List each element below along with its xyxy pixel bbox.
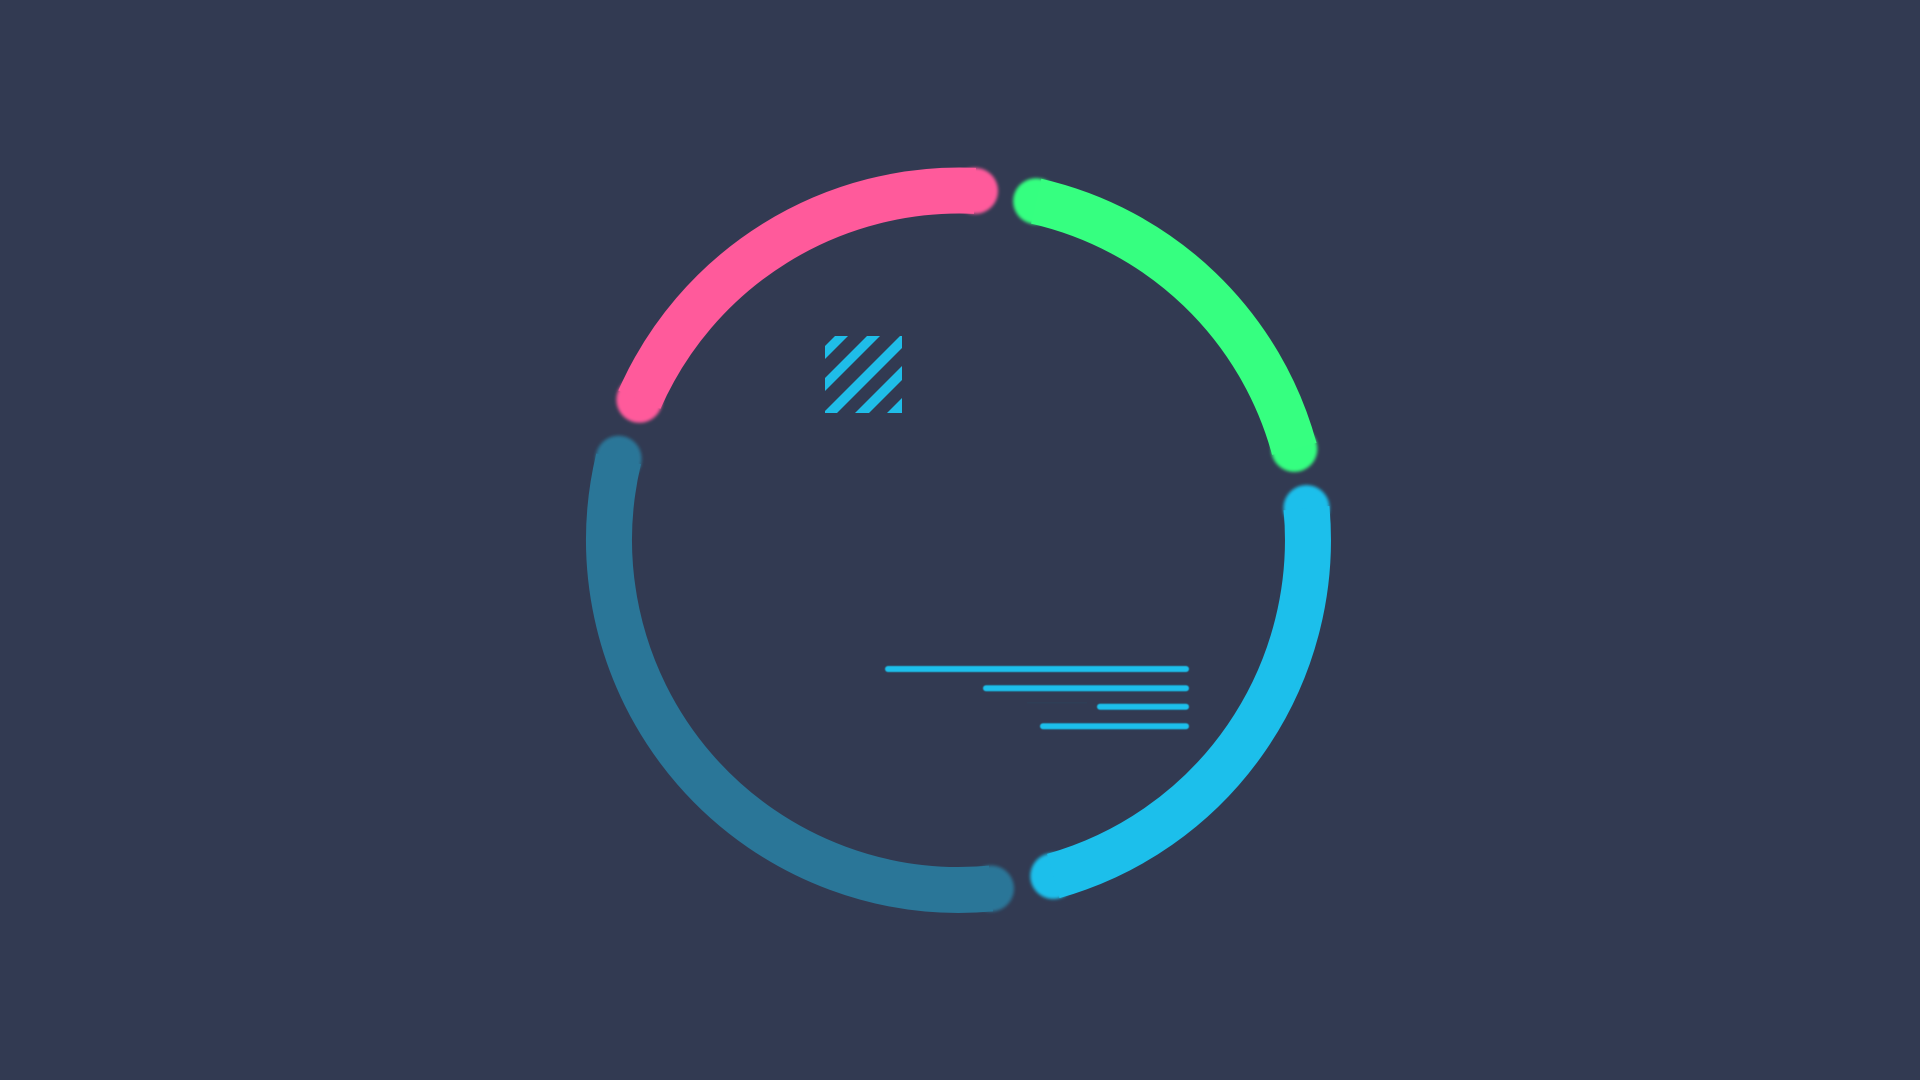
bar 2 [983,685,1189,691]
bar 1 [885,666,1189,672]
ring segment: cyan [1030,485,1330,899]
ring chart [596,168,1330,911]
icon: diagonal striped square [825,336,902,413]
ring segment: teal [596,436,1014,912]
faint line [1027,702,1087,703]
ring segment: green [1013,178,1317,472]
ring segment: pink [616,168,998,423]
bar 3 [1097,704,1189,710]
bar 4 [1040,723,1189,729]
bar list [885,666,1189,729]
